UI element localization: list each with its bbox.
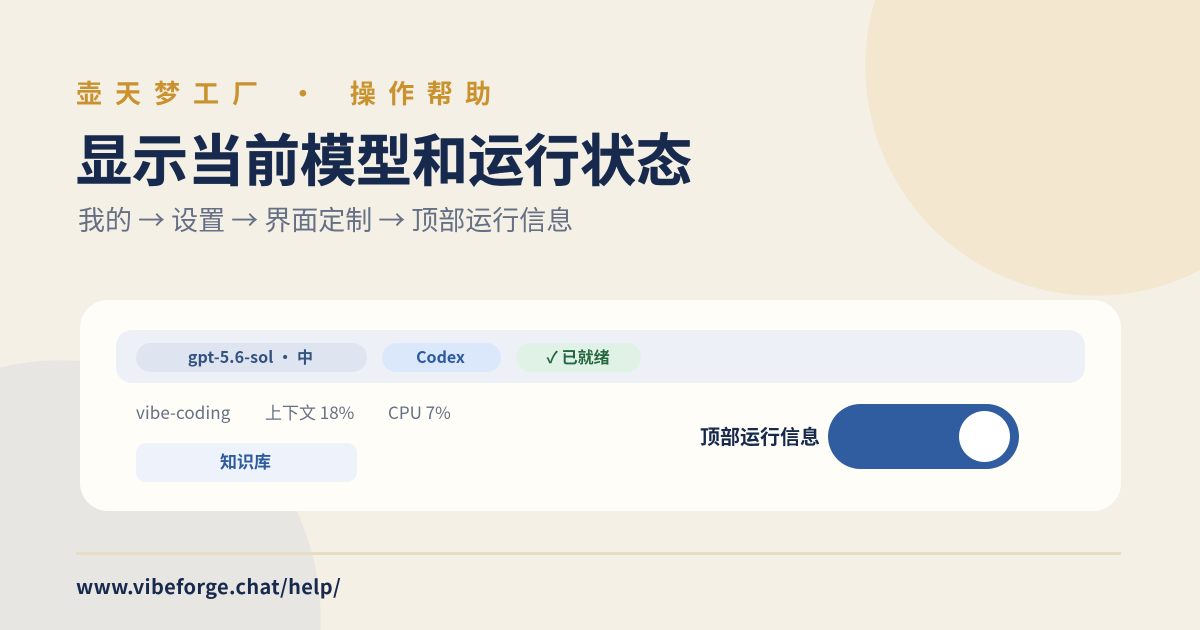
eyebrow: brand and section: 壶天梦工厂 · 操作帮助 [76,74,503,111]
button: knowledge base [136,443,357,482]
text: CPU usage: CPU 7% [388,399,451,424]
toggle switch: on [828,404,1019,469]
subtitle: settings path: 我的 → 设置 → 界面定制 → 顶部运行信息 [78,199,573,238]
toggle label: 顶部运行信息 [700,421,820,450]
pill: ready status: ✓ 已就绪 [546,344,610,368]
panel: status card [80,300,1121,511]
decorative circle: bottom left [0,360,321,630]
toggle knob [959,411,1010,462]
pill: ready status [516,343,641,372]
text: context usage: 上下文 18% [265,399,354,424]
pill: model: gpt-5.6-sol · 中 [188,344,313,368]
pill: model [136,343,367,372]
button: knowledge base: 知识库 [220,448,271,473]
pill: Codex [382,343,501,372]
footer URL: www.vibeforge.chat/help/ [76,571,341,600]
pill: Codex: Codex [416,344,465,368]
title: 显示当前模型和运行状态 [76,117,692,198]
decorative circle: top right [865,0,1200,296]
text: workspace: vibe-coding [136,399,230,424]
panel: top status bar [116,330,1085,383]
